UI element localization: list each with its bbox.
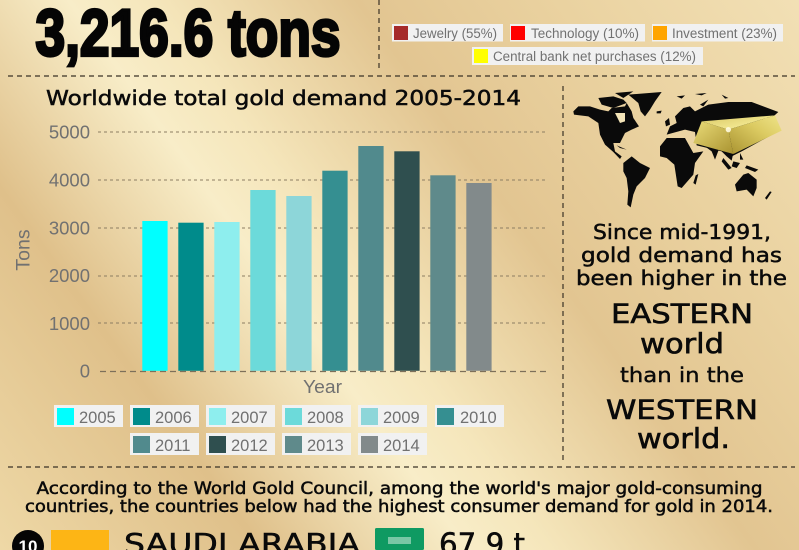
legend: years: 2006	[155, 409, 192, 427]
ranking row: Saudi Arabia	[12, 527, 525, 550]
legend: gold demand by use	[392, 24, 783, 65]
text block: eastern vs western demand: been higher in the	[576, 266, 787, 290]
legend: gold demand by use: Jewelry (55%)	[413, 26, 497, 41]
bar chart: total gold demand by year: 4000	[49, 170, 90, 190]
bar chart: total gold demand by year: 0	[80, 360, 90, 382]
bar chart: total gold demand by year: 5000	[49, 122, 90, 142]
text block: eastern vs western demand	[576, 220, 787, 455]
icon: world map with gold bar	[573, 91, 782, 207]
bar chart: total gold demand by year: 1000	[49, 313, 90, 334]
bar chart: total gold demand by year: Tons	[12, 229, 34, 271]
bar chart: total gold demand by year	[12, 122, 548, 397]
text block: eastern vs western demand: than in the	[620, 363, 744, 387]
text block: eastern vs western demand: world.	[637, 422, 730, 455]
text block: eastern vs western demand: gold demand has	[581, 243, 782, 267]
legend: years	[54, 405, 504, 455]
legend: years: 2012	[231, 437, 268, 455]
legend: years: 2008	[307, 409, 344, 427]
legend: years: 2010	[460, 409, 497, 427]
chart heading: Worldwide total gold demand 2005-2014	[46, 86, 521, 110]
text block: eastern vs western demand: world	[640, 327, 724, 360]
legend: gold demand by use: Technology (10%)	[531, 26, 639, 41]
legend: gold demand by use: Investment (23%)	[672, 26, 777, 41]
text block: eastern vs western demand: WESTERN	[606, 395, 758, 426]
bar chart: total gold demand by year: 3000	[49, 218, 90, 238]
text block: World Gold Council intro	[25, 479, 773, 516]
legend: years: 2011	[155, 437, 190, 455]
legend: gold demand by use: Central bank net purchases (12%)	[493, 49, 696, 64]
text block: eastern vs western demand: Since mid-1991,	[593, 220, 771, 244]
legend: years: 2013	[307, 437, 344, 455]
bar chart: total gold demand by year: 2000	[49, 265, 90, 286]
text block: eastern vs western demand: EASTERN	[611, 299, 753, 330]
legend: years: 2014	[383, 437, 420, 455]
text block: World Gold Council intro: According to the World Gold Council, among the world's major gold-consuming	[36, 479, 762, 498]
legend: years: 2009	[383, 409, 420, 427]
bar chart: total gold demand by year: Year	[303, 377, 342, 397]
legend: years: 2005	[79, 409, 116, 427]
text block: World Gold Council intro: countries, the countries below had the highest consumer demand for gold in 2014.	[25, 497, 773, 516]
legend: years: 2007	[231, 409, 268, 427]
